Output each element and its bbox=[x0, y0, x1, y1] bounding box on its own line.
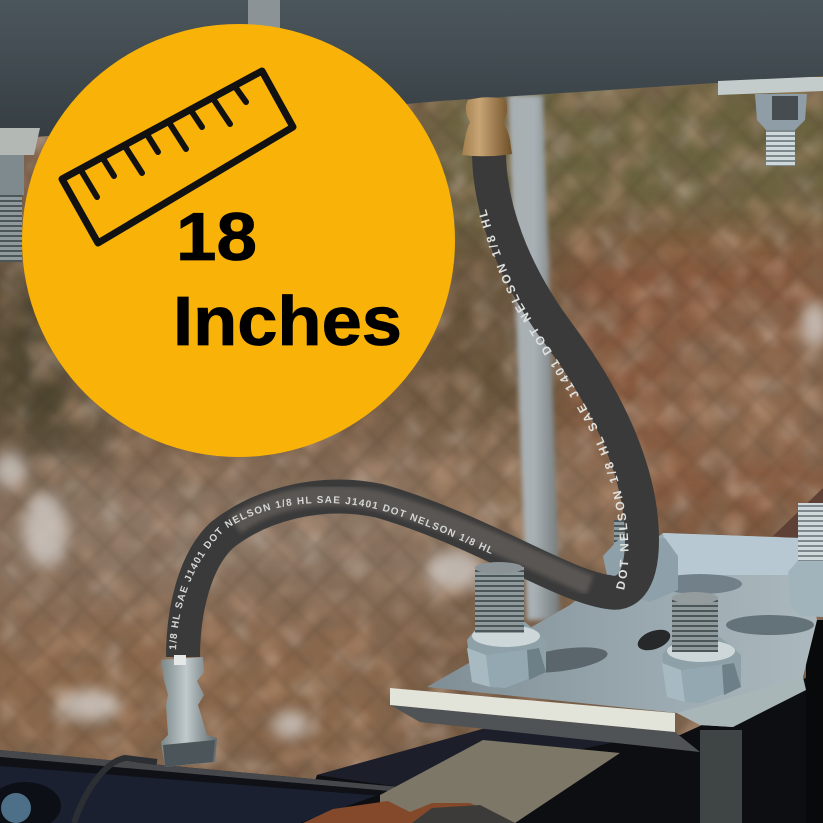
label: Inches: Inches bbox=[173, 282, 402, 360]
rear nut bbox=[603, 520, 678, 602]
icon: ruler bbox=[62, 71, 293, 243]
label: 18: 18 bbox=[176, 199, 257, 275]
right bolt at edge bbox=[788, 503, 823, 617]
upper left bolt bbox=[0, 128, 40, 262]
hose print upper: DOT NELSON 1/8 HL SAE J1401 DOT NELSON 1/8 HL bbox=[479, 209, 628, 590]
bracket plate bbox=[390, 533, 817, 752]
upper right bolt bbox=[718, 77, 823, 166]
bottom black beam bbox=[0, 620, 823, 823]
yellow badge bbox=[22, 24, 455, 457]
brass fitting bbox=[462, 97, 512, 156]
brake hose bbox=[166, 154, 659, 657]
fence pole bbox=[508, 95, 560, 620]
lower steel fitting bbox=[161, 655, 217, 767]
left bolt bbox=[467, 562, 546, 688]
top beam bbox=[0, 0, 823, 140]
hose print lower: 1/8 HL SAE J1401 DOT NELSON 1/8 HL SAE J1401 DOT NELSON 1/8 HL bbox=[169, 496, 492, 650]
front right bolt bbox=[662, 592, 741, 703]
rusty bracket corner bbox=[773, 488, 823, 540]
